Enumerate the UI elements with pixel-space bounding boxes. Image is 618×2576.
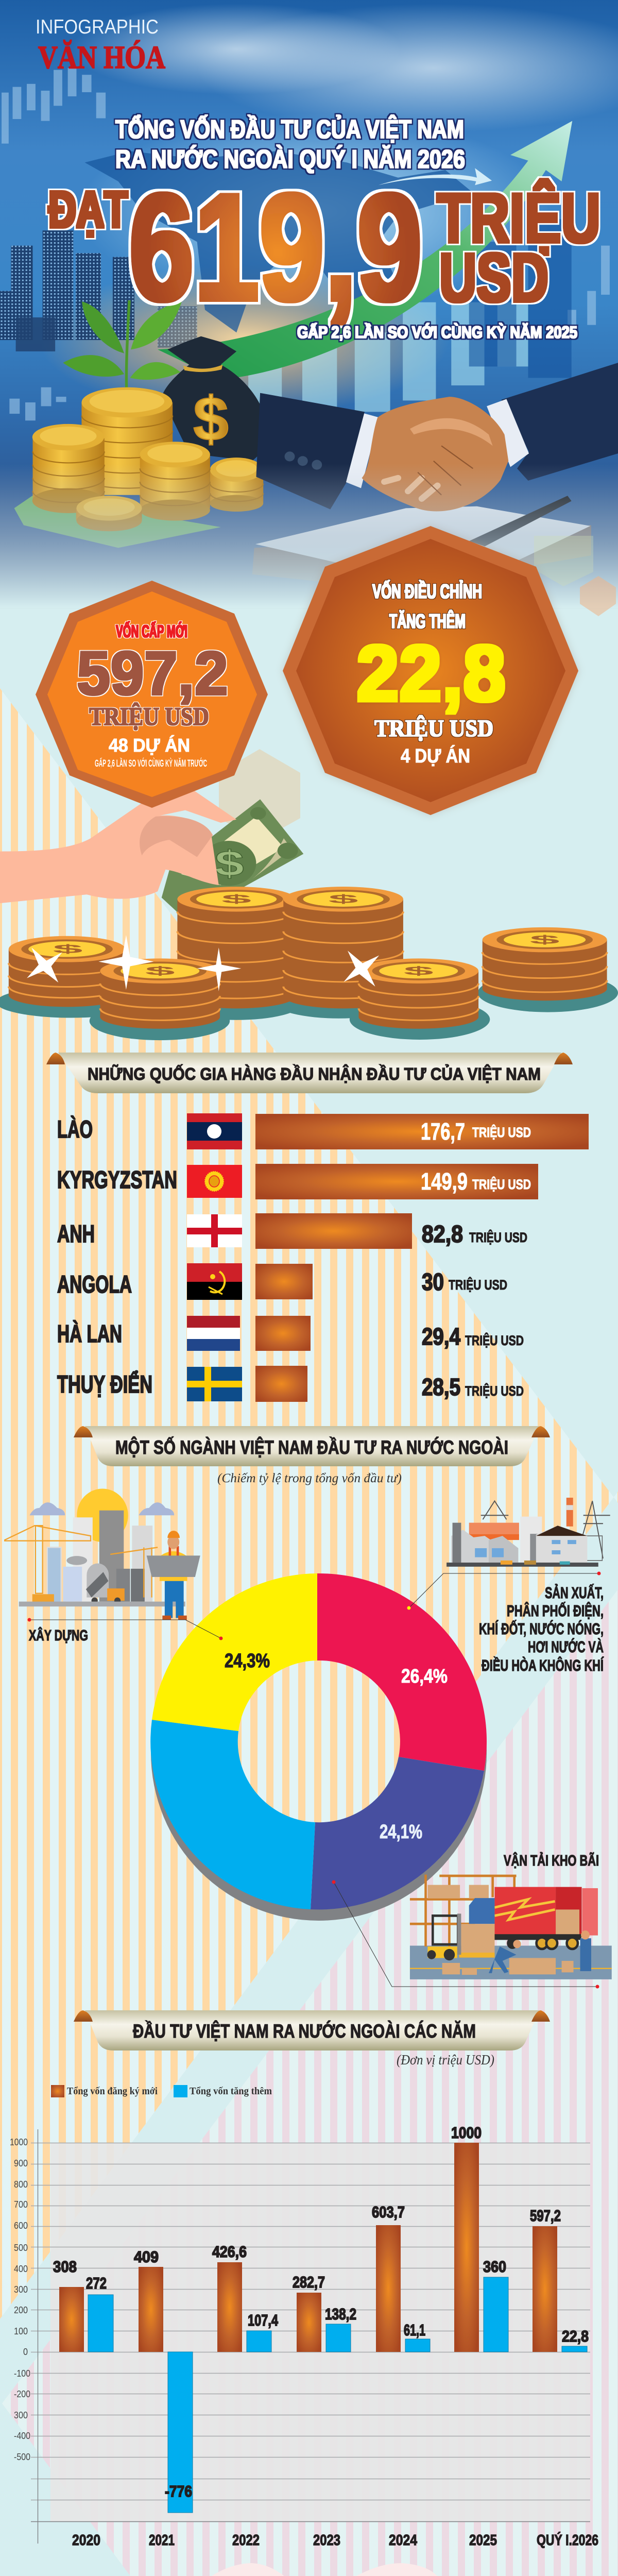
- illustration: coin stacks: $: [530, 933, 560, 946]
- illustration: power plant: [447, 1498, 610, 1567]
- bar value labels: 61,1: [404, 2321, 425, 2339]
- bar chart: investment by year: [10, 2124, 598, 2549]
- hero headline number: 619,9: [129, 162, 422, 332]
- bar value labels: 603,7: [372, 2203, 405, 2221]
- chart legend: Tổng vốn đăng ký mới: [67, 2086, 158, 2097]
- bar value labels: 22,8: [562, 2327, 589, 2345]
- country row: Lào: TRIỆU USD: [472, 1124, 531, 1140]
- y axis labels: 600: [14, 2221, 28, 2231]
- chart unit note: (Đơn vị triệu USD): [397, 2052, 494, 2067]
- logo top: VĂN HÓA: [38, 40, 165, 75]
- country row: Angola: TRIỆU USD: [449, 1277, 507, 1293]
- bar value labels: 1000: [451, 2124, 482, 2142]
- country row: Thuỵ Điển: 28,5: [422, 1374, 460, 1400]
- bar value labels: 272: [86, 2274, 107, 2292]
- illustration: coin stacks: $: [145, 964, 176, 978]
- year labels: 2025: [469, 2532, 497, 2549]
- country row: Kyrgyzstan: [57, 1164, 538, 1199]
- country row: Lào: LÀO: [57, 1115, 93, 1143]
- heading ribbon: investment by year: ĐẦU TƯ VIỆT NAM RA NƯỚC NGOÀI CÁC NĂM: [133, 2020, 476, 2042]
- panel: adjusted capital hexagon: 22,8: [356, 629, 506, 718]
- illustration: coin stacks: $: [328, 892, 359, 906]
- country row: Anh: [57, 1213, 527, 1249]
- bar value labels: 308: [53, 2258, 77, 2276]
- country row: Thuỵ Điển: TRIỆU USD: [465, 1383, 524, 1399]
- country row: Thuỵ Điển: [57, 1366, 524, 1402]
- y axis labels: [10, 2137, 30, 2462]
- country row: Angola: 30: [422, 1268, 444, 1295]
- skyline: [0, 230, 197, 351]
- hero title: [115, 114, 465, 174]
- plant: [63, 300, 182, 400]
- hero headline number: ĐẠT: [48, 181, 128, 239]
- bottom illustration: wallet and coins: [3, 2563, 615, 2576]
- illustration: coin stacks: $: [53, 942, 83, 956]
- panel: adjusted capital hexagon: TĂNG THÊM: [389, 610, 466, 633]
- year labels: 2021: [149, 2532, 175, 2549]
- country row: Anh: TRIỆU USD: [469, 1229, 527, 1245]
- y axis labels: 700: [14, 2199, 28, 2210]
- hero subtitle: GẤP 2,6 LẦN SO VỚI CÙNG KỲ NĂM 2025: [297, 323, 577, 342]
- bar value labels: 107,4: [248, 2311, 279, 2329]
- y axis labels: 200: [14, 2305, 28, 2315]
- country row: Kyrgyzstan: KYRGYZSTAN: [57, 1166, 177, 1193]
- label: construction: XÂY DỰNG: [29, 1626, 88, 1644]
- flag: Netherlands: [187, 1316, 240, 1351]
- year labels: 2020: [72, 2532, 100, 2549]
- money bag: $: [193, 384, 229, 454]
- country row: Lào: [57, 1113, 589, 1149]
- donut chart: 24,1%: [380, 1821, 422, 1843]
- heading ribbon: investment by year: [74, 2010, 550, 2050]
- year labels: QUÝ I.2026: [537, 2531, 598, 2549]
- panel: adjusted capital hexagon: [283, 526, 578, 815]
- pink striped diagonal band: [2, 1589, 618, 2576]
- label: power and utilities sector: [479, 1584, 604, 1674]
- hero fade into background: [0, 464, 618, 608]
- flag: Sweden: [187, 1367, 242, 1401]
- panel: adjusted capital hexagon: VỐN ĐIỀU CHỈNH: [372, 580, 482, 603]
- hero title: TỔNG VỐN ĐẦU TƯ CỦA VIỆT NAM: [115, 114, 464, 144]
- y axis labels: 1000: [10, 2137, 28, 2147]
- y axis labels: 400: [14, 2264, 28, 2274]
- logo top: [36, 16, 165, 75]
- y axis labels: -200: [14, 2389, 30, 2399]
- logo top: INFOGRAPHIC: [36, 16, 159, 38]
- bar value labels: [53, 2124, 589, 2500]
- flag: Kyrgyzstan: [187, 1165, 242, 1198]
- flag: Angola: [187, 1263, 242, 1300]
- green banknotes: [14, 495, 221, 548]
- country row: Lào: 176,7: [421, 1118, 465, 1145]
- illustration: coin stacks: [0, 887, 618, 1040]
- money bag: [162, 336, 269, 461]
- orange striped diagonal band: [0, 688, 618, 2319]
- hero headline number: [48, 162, 600, 332]
- illustration: construction: [5, 1488, 200, 1620]
- heading ribbon: sectors: MỘT SỐ NGÀNH VIỆT NAM ĐẦU TƯ RA NƯỚC NGOÀI: [115, 1436, 508, 1458]
- country row: Anh: ANH: [57, 1220, 95, 1247]
- flag: Laos: [187, 1113, 242, 1149]
- connector: construction: [28, 1618, 222, 1640]
- y axis labels: 300: [14, 2284, 28, 2295]
- country row: Anh: 82,8: [422, 1221, 463, 1247]
- y axis labels: 800: [14, 2179, 28, 2190]
- growth arrow: [158, 121, 572, 380]
- panel: new capital hexagon: 48 DỰ ÁN: [109, 735, 190, 756]
- document and pen: [252, 496, 591, 589]
- segment: cyan: [150, 1720, 315, 1909]
- flag: England: [187, 1214, 242, 1247]
- panel: new capital hexagon: 597,2: [77, 639, 228, 708]
- illustration: coin stacks: $: [404, 964, 434, 978]
- heading ribbon: top countries: NHỮNG QUỐC GIA HÀNG ĐẦU NHẬN ĐẦU TƯ CỦA VIỆT NAM: [88, 1064, 541, 1083]
- bar value labels: -776: [165, 2482, 192, 2500]
- year labels: 2022: [232, 2532, 260, 2549]
- hand holding banknote: [0, 790, 303, 920]
- bar value labels: 426,6: [212, 2243, 247, 2261]
- panel: adjusted capital hexagon: 4 DỰ ÁN: [401, 744, 470, 767]
- illustration: coin stacks: $: [221, 892, 252, 906]
- year labels: [72, 2531, 598, 2549]
- bars: [59, 2143, 587, 2513]
- panel: new capital hexagon: GẤP 2,6 LẦN SO VỚI CÙNG KỲ NĂM TRƯỚC: [95, 758, 207, 769]
- y axis labels: -400: [14, 2431, 30, 2441]
- segment: yellow: [152, 1573, 317, 1731]
- donut chart: 26,4%: [401, 1666, 448, 1687]
- segment: red: [317, 1573, 487, 1771]
- decorative hexagons: [219, 536, 616, 841]
- hand holding banknote: $: [215, 843, 244, 884]
- connector: transport: [332, 1880, 599, 1989]
- hero headline number: USD: [439, 240, 548, 316]
- bar value labels: 138,2: [325, 2305, 356, 2323]
- chart legend: [51, 2085, 272, 2097]
- sectors subtitle: (Chiếm tỷ lệ trong tổng vốn đầu tư): [217, 1471, 402, 1485]
- y axis labels: 300: [14, 2410, 28, 2420]
- country row: Hà Lan: [57, 1316, 524, 1351]
- gold coin stacks: [32, 387, 263, 531]
- heading ribbon: sectors: [74, 1426, 550, 1466]
- y axis labels: 100: [14, 2326, 28, 2336]
- year labels: 2024: [389, 2532, 417, 2549]
- panel: new capital hexagon: [36, 581, 268, 808]
- heading ribbon: top countries: [46, 1053, 573, 1093]
- world map silhouette: [85, 151, 473, 332]
- right bars: [248, 302, 528, 429]
- country row: Hà Lan: HÀ LAN: [57, 1320, 122, 1347]
- hero title: RA NƯỚC NGOÀI QUÝ I NĂM 2026: [115, 145, 465, 174]
- country row: Kyrgyzstan: 149,9: [421, 1168, 468, 1195]
- bar value labels: 597,2: [530, 2207, 561, 2225]
- country row: Angola: [57, 1263, 507, 1300]
- panel: new capital hexagon: VỐN CẤP MỚI: [116, 621, 187, 641]
- country row: Hà Lan: TRIỆU USD: [465, 1332, 524, 1348]
- y axis labels: -100: [14, 2368, 30, 2379]
- segment: indigo: [311, 1757, 484, 1909]
- donut chart: 24,3%: [225, 1650, 270, 1672]
- handshake: [256, 363, 618, 511]
- bar value labels: 360: [483, 2258, 506, 2276]
- country row: Angola: ANGOLA: [57, 1270, 132, 1298]
- y axis labels: 500: [14, 2243, 28, 2253]
- connector: power plant: [407, 1571, 600, 1609]
- candlesticks: [2, 68, 610, 420]
- y axis labels: -500: [14, 2452, 30, 2462]
- bar value labels: 282,7: [293, 2273, 325, 2291]
- bar value labels: 409: [134, 2248, 159, 2266]
- country row: Hà Lan: 29,4: [422, 1323, 460, 1350]
- pink blob: [31, 2563, 607, 2576]
- panel: adjusted capital hexagon: TRIỆU USD: [374, 715, 493, 742]
- panel: new capital hexagon: TRIỆU USD: [89, 702, 209, 731]
- year labels: 2023: [313, 2532, 340, 2549]
- y axis labels: 900: [14, 2158, 28, 2168]
- hero illustration: [0, 0, 618, 608]
- y axis labels: 0: [23, 2347, 28, 2357]
- illustration: truck and warehouse: [410, 1875, 612, 1979]
- country row: Thuỵ Điển: THUỴ ĐIỂN: [57, 1370, 152, 1398]
- country row: Kyrgyzstan: TRIỆU USD: [472, 1176, 531, 1192]
- chart legend: Tổng vốn tăng thêm: [190, 2086, 272, 2097]
- donut chart: [150, 1573, 487, 1921]
